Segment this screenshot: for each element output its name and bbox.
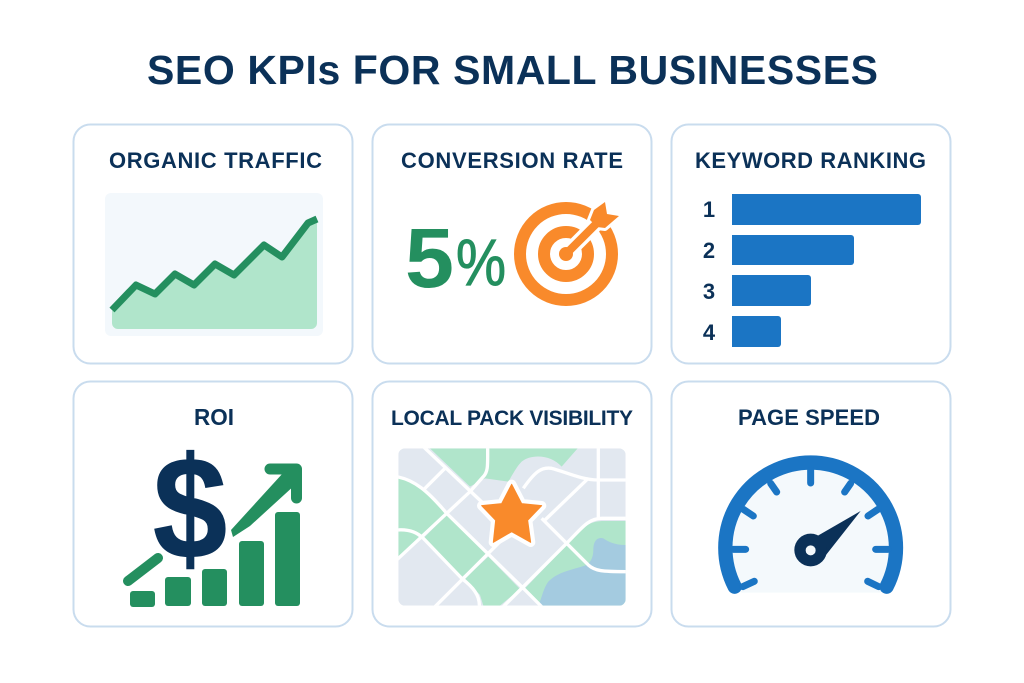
panel: local pack visibility bbox=[372, 382, 652, 626]
icon: dollar sign: $ bbox=[153, 427, 227, 589]
panel: organic traffic bbox=[74, 124, 352, 364]
icon: rising arrow bbox=[128, 469, 296, 581]
bar chart: ranks 1 to 4 bbox=[703, 194, 921, 347]
title: SEO KPIs FOR SMALL BUSINESSES bbox=[147, 47, 878, 93]
figure: 5 percent bbox=[405, 211, 506, 305]
panel: page speed bbox=[672, 382, 950, 626]
panel: conversion rate bbox=[372, 124, 652, 364]
heading: local pack visibility: LOCAL PACK VISIBILITY bbox=[391, 407, 633, 430]
infographic canvas bbox=[72, 56, 952, 628]
icon: target with arrow bbox=[520, 202, 619, 300]
bar chart: ranks 1 to 4: 1 bbox=[703, 197, 715, 222]
bar chart: ranks 1 to 4: 4 bbox=[703, 320, 716, 345]
icon: speedometer gauge bbox=[725, 463, 896, 593]
heading: conversion rate: CONVERSION RATE bbox=[401, 148, 623, 173]
heading: organic traffic: ORGANIC TRAFFIC bbox=[109, 148, 322, 173]
area chart: rising traffic bbox=[105, 193, 323, 336]
bar chart: ranks 1 to 4: 2 bbox=[703, 238, 715, 263]
bar chart: ranks 1 to 4: 3 bbox=[703, 279, 715, 304]
heading: keyword ranking: KEYWORD RANKING bbox=[695, 148, 926, 173]
figure: 5 percent: 5 bbox=[405, 211, 454, 305]
heading: ROI: ROI bbox=[194, 404, 234, 430]
icon: growth bars bbox=[130, 512, 300, 607]
map with star pin bbox=[397, 447, 627, 607]
heading: page speed: PAGE SPEED bbox=[738, 405, 880, 430]
figure: 5 percent: % bbox=[456, 225, 506, 299]
panel: ROI bbox=[74, 382, 352, 626]
panel: keyword ranking bbox=[672, 124, 950, 364]
